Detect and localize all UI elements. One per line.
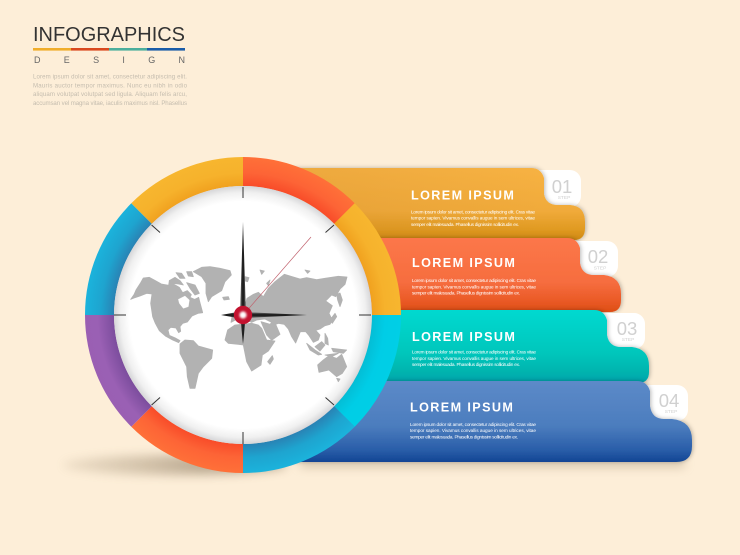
heading: LOREM IPSUM bbox=[411, 188, 515, 202]
band bbox=[290, 238, 621, 312]
step tab 01: 01 bbox=[552, 176, 572, 197]
band bbox=[290, 310, 649, 383]
body text: tempor sapien. Vivamus convallis augue in sem ultrices, vitae bbox=[412, 356, 536, 361]
band bbox=[290, 168, 585, 240]
body text bbox=[410, 422, 536, 439]
body text bbox=[411, 210, 535, 227]
body text: semper elit malesuada. Phasellus dignissim sollicitudin ex. bbox=[410, 434, 518, 439]
colour rule bbox=[33, 48, 185, 51]
step tab 03: STEP bbox=[622, 337, 634, 343]
world map bbox=[131, 267, 347, 388]
body text: semper elit malesuada. Phasellus dignissim sollicitudin ex. bbox=[412, 291, 520, 296]
coloured ring bbox=[85, 157, 401, 473]
body text: tempor sapien. Vivamus convallis augue in sem ultrices, vitae bbox=[411, 216, 535, 221]
body text bbox=[412, 278, 536, 296]
title block bbox=[33, 23, 188, 107]
body text: Lorem ipsum dolor sit amet, consectetur adipiscing elit. Cras vitae bbox=[412, 278, 536, 283]
step tab 02: STEP bbox=[594, 266, 606, 272]
step tab 01: STEP bbox=[558, 195, 570, 201]
intro paragraph: aliquam volutpat volutpat sed ligula. Aliquam felis arcu, bbox=[33, 91, 187, 98]
step tab 02: 02 bbox=[588, 246, 608, 267]
step tab 02 bbox=[567, 241, 618, 277]
clock bbox=[85, 157, 401, 473]
body text: Lorem ipsum dolor sit amet, consectetur adipiscing elit. Cras vitae bbox=[412, 350, 536, 354]
body text: semper elit malesuada. Phasellus dignissim sollicitudin ex. bbox=[411, 222, 519, 227]
step tab 01 bbox=[530, 170, 581, 207]
africa eurasia australia bbox=[225, 270, 347, 382]
body text: tempor sapien. Vivamus convallis augue in sem ultrices, vitae bbox=[410, 428, 536, 433]
panel: step 2 bbox=[290, 238, 621, 312]
heading: LOREM IPSUM bbox=[410, 400, 514, 414]
panel: step 4 bbox=[290, 381, 692, 462]
step tab 03 bbox=[594, 313, 645, 349]
title: INFOGRAPHICS bbox=[33, 23, 185, 46]
body text: Lorem ipsum dolor sit amet, consectetur adipiscing elit. Cras vitae bbox=[411, 210, 535, 214]
step tab 03: 03 bbox=[617, 318, 637, 339]
band bbox=[290, 381, 692, 462]
hour ticks bbox=[114, 187, 371, 444]
body text: Lorem ipsum dolor sit amet, consectetur adipiscing elit. Cras vitae bbox=[410, 422, 536, 427]
body text: semper elit malesuada. Phasellus dignissim sollicitudin ex. bbox=[412, 362, 520, 367]
intro paragraph bbox=[33, 74, 188, 107]
panel: step 3 bbox=[290, 310, 649, 383]
second hand bbox=[244, 237, 311, 314]
clock hands bbox=[221, 222, 307, 344]
step tab 04 bbox=[637, 385, 688, 421]
clock face bbox=[114, 186, 372, 444]
heading: LOREM IPSUM bbox=[412, 256, 516, 270]
body text: tempor sapien. Vivamus convallis augue in sem ultrices, vitae bbox=[412, 284, 536, 289]
intro paragraph: Mauris auctor tempor maximus. Nunc eu nibh in odio bbox=[33, 82, 188, 89]
step tab 04: STEP bbox=[665, 409, 677, 415]
ground shadow bbox=[63, 455, 685, 475]
heading: LOREM IPSUM bbox=[412, 330, 516, 344]
intro paragraph: accumsan vel magna vitae, iaculis maximus nisl. Phasellus bbox=[33, 100, 187, 107]
intro paragraph: Lorem ipsum dolor sit amet, consectetur adipiscing elit. bbox=[33, 74, 187, 80]
centre hub bbox=[234, 306, 252, 324]
panel: step 1 bbox=[290, 168, 585, 240]
subtitle: DESIGN bbox=[34, 55, 185, 65]
body text bbox=[412, 350, 536, 367]
step tab 04: 04 bbox=[659, 390, 679, 411]
americas and greenland bbox=[131, 267, 231, 388]
